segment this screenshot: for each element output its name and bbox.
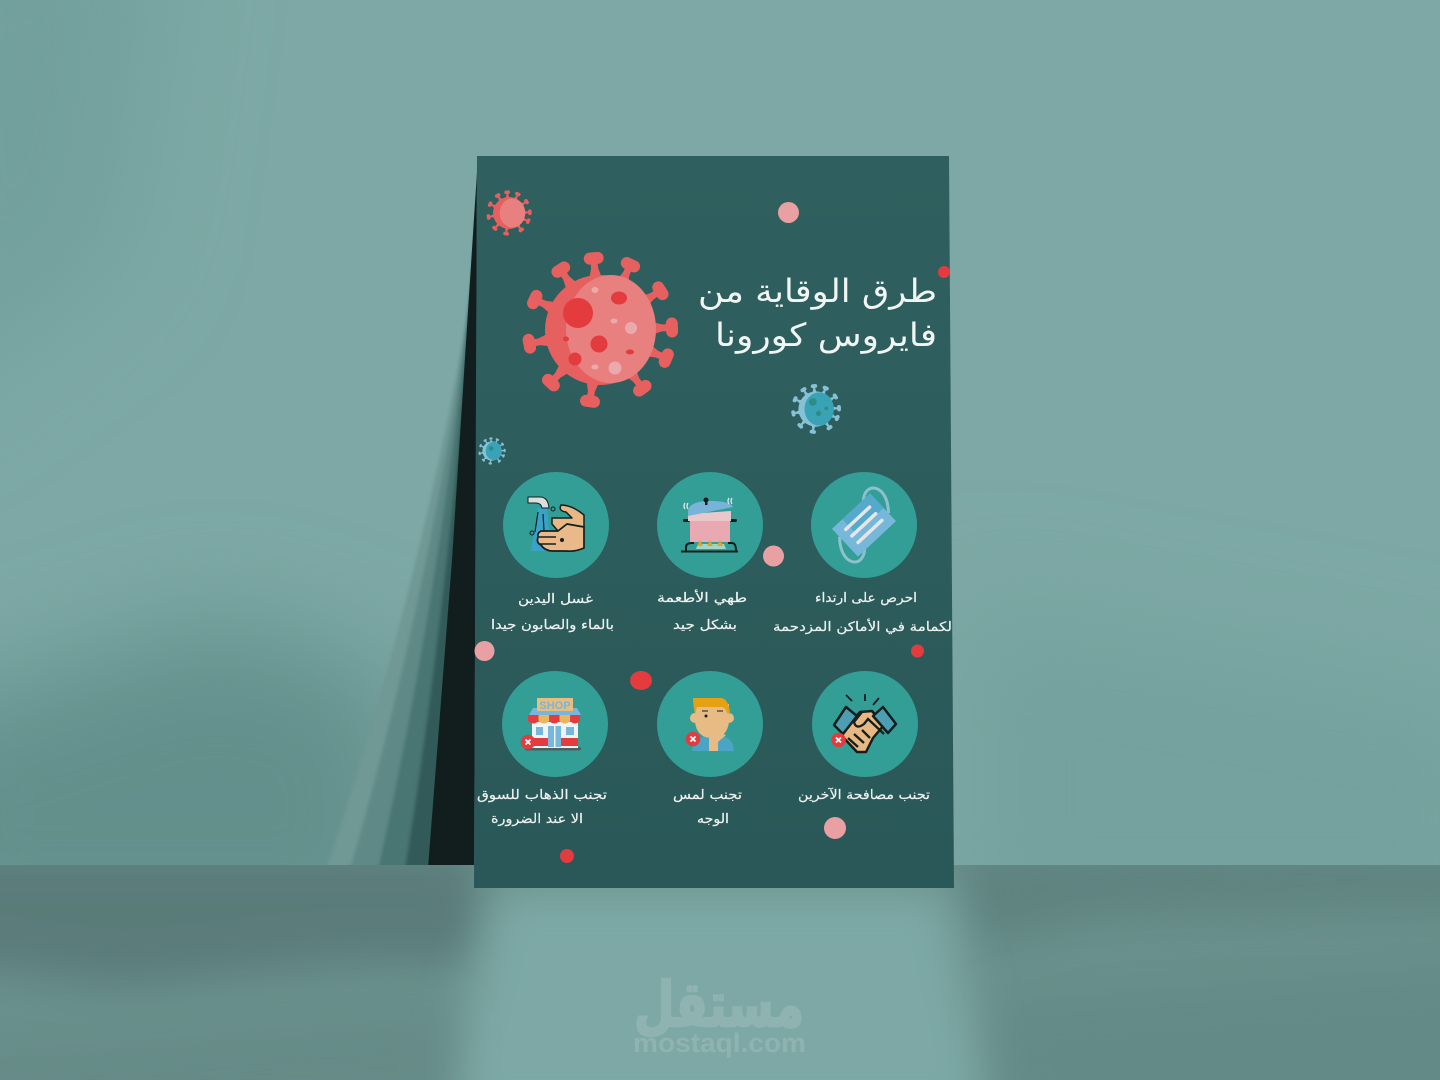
poster sheet — [474, 156, 954, 888]
label: تجنب لمس — [673, 788, 742, 803]
icon: handshake — [831, 694, 896, 752]
label — [477, 788, 607, 827]
watermark — [633, 968, 806, 1058]
dot — [630, 671, 652, 690]
icon circle — [811, 472, 917, 578]
label: الوجه — [697, 812, 729, 827]
decorative dot — [778, 202, 799, 223]
label: غسل اليدين — [518, 592, 593, 607]
label — [657, 589, 747, 633]
icon: man touching face — [686, 698, 734, 751]
label — [491, 592, 614, 633]
label: لكمامة في الأماكن المزدحمة — [773, 618, 952, 635]
decorative dot — [938, 266, 950, 278]
icon: shop: SHOP — [539, 700, 571, 712]
poster — [474, 156, 954, 888]
label: بشكل جيد — [673, 618, 737, 633]
label: طهي الأطعمة — [657, 589, 747, 606]
label — [773, 591, 952, 635]
icon circle — [503, 472, 609, 578]
label: احرص على ارتداء — [815, 591, 917, 606]
icon circle — [657, 472, 763, 578]
item: wash hands — [491, 472, 614, 633]
icon: shop — [521, 698, 581, 750]
virus: blue medium — [791, 384, 841, 434]
item: avoid handshakes — [798, 671, 930, 803]
title — [698, 272, 937, 354]
dot — [911, 644, 924, 658]
label — [673, 788, 742, 827]
dot — [763, 546, 784, 566]
label: تجنب مصافحة الآخرين — [798, 787, 930, 803]
watermark: mostaql.com — [633, 1028, 806, 1058]
dot — [474, 641, 494, 661]
label: الا عند الضرورة — [491, 812, 583, 827]
item: avoid the market — [477, 671, 608, 827]
virus: large red — [522, 251, 678, 409]
dot — [560, 849, 574, 863]
item: avoid touching face — [657, 671, 763, 827]
dot — [824, 817, 846, 839]
label: تجنب الذهاب للسوق — [477, 788, 607, 803]
virus: top-left small red — [486, 190, 532, 236]
wall shadow cast by poster — [326, 172, 478, 888]
icon: face mask — [822, 484, 906, 566]
watermark: مستقل — [634, 968, 804, 1041]
title: فايروس كورونا — [715, 316, 937, 354]
title: طرق الوقاية من — [698, 272, 937, 310]
icon circle — [502, 671, 608, 777]
icon circle — [657, 671, 763, 777]
icon: hand washing — [528, 497, 584, 551]
label: بالماء والصابون جيدا — [491, 618, 614, 633]
item: wear a mask — [773, 472, 952, 635]
item: cook food well — [657, 472, 763, 633]
icon: cooking pot — [681, 498, 738, 552]
floor with shadows — [0, 850, 1440, 1080]
virus: blue small — [478, 437, 506, 465]
icon circle — [812, 671, 918, 777]
